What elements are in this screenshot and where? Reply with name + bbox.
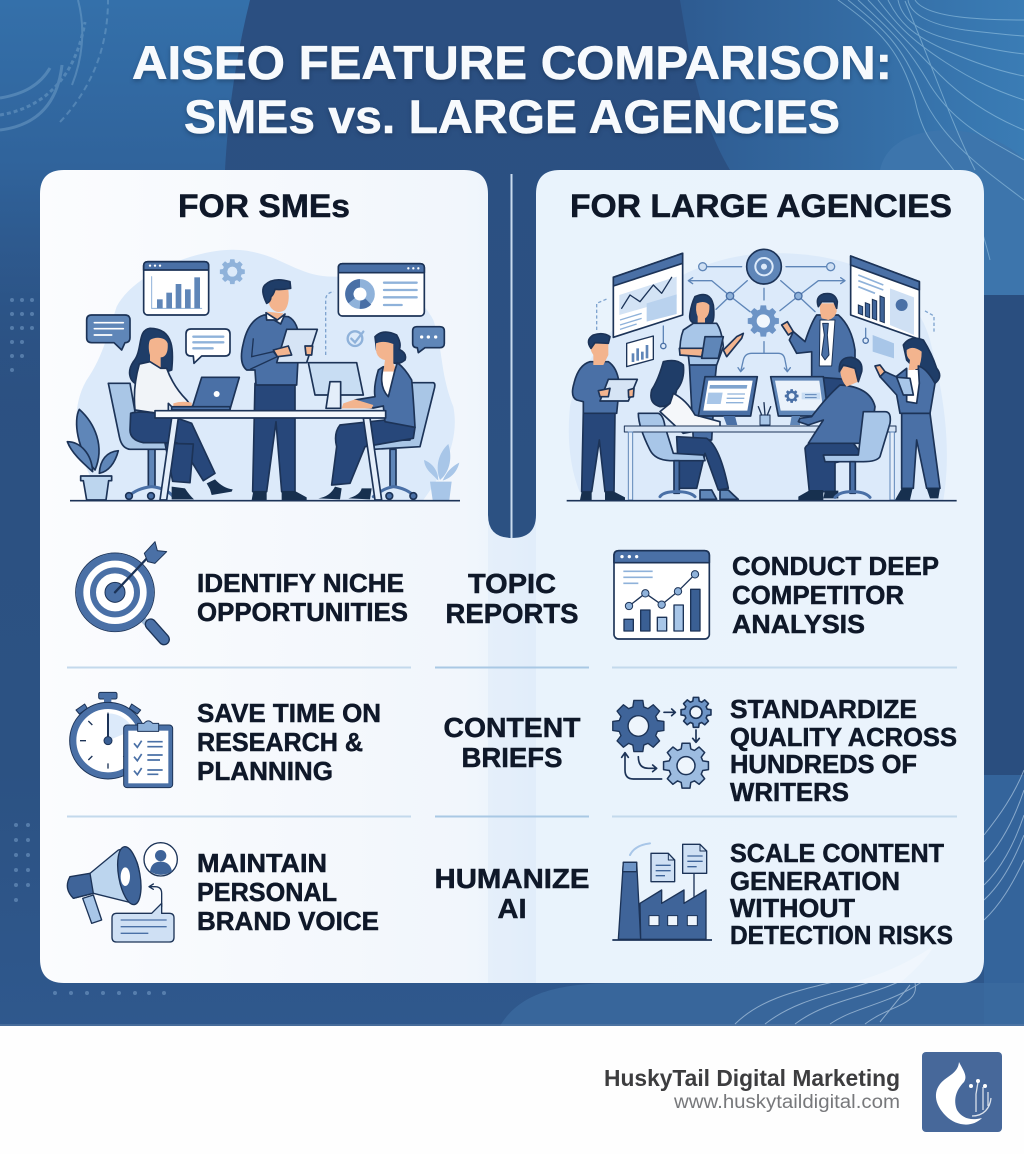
network diagram <box>661 263 868 372</box>
speech bubble: white <box>186 329 230 363</box>
icon: three gears <box>613 697 711 788</box>
laptop <box>172 377 239 410</box>
left woman <box>130 328 233 499</box>
left monitor <box>698 377 757 425</box>
desk <box>624 426 896 500</box>
standing man <box>241 280 317 500</box>
text: GENERATION <box>730 866 900 896</box>
text: CONDUCT DEEP <box>732 551 939 581</box>
text: WRITERS <box>730 777 849 807</box>
text: MAINTAIN <box>197 848 327 878</box>
icon: analytics window <box>614 551 709 639</box>
row 2, center label: content briefs <box>444 712 580 773</box>
brand url: www.huskytaildigital.com <box>673 1092 900 1113</box>
donut chart window <box>338 264 424 316</box>
text: IDENTIFY NICHE <box>197 568 404 598</box>
icon: brand logo <box>922 1052 1002 1132</box>
check mark icon <box>348 331 363 346</box>
speech bubble: dots <box>413 327 444 353</box>
text: QUALITY ACROSS <box>730 722 957 752</box>
text: SAVE TIME ON <box>197 698 381 728</box>
seated man <box>798 357 890 500</box>
left chair <box>108 383 173 499</box>
pen cup <box>758 403 771 425</box>
footer bar <box>0 1026 1024 1154</box>
title: AISEO FEATURE COMPARISON: <box>132 36 892 89</box>
right chair <box>373 383 435 499</box>
icon: target and magnifier <box>76 542 167 639</box>
text: COMPETITOR <box>732 580 904 610</box>
table <box>155 411 386 500</box>
illustration: SME team at a desk <box>67 250 460 501</box>
row 3, agency feature: scale content <box>612 838 953 950</box>
text: OPPORTUNITIES <box>197 597 408 627</box>
text: ANALYSIS <box>732 609 865 639</box>
hub circle <box>747 249 781 284</box>
text <box>197 568 408 627</box>
man with tablet <box>572 334 637 500</box>
seated woman <box>638 361 738 499</box>
text: RESEARCH & <box>197 727 363 757</box>
row 1, SME feature: niche opportunities <box>76 542 408 639</box>
speech bubble: lines <box>87 315 130 350</box>
row 2, center label: content briefs: CONTENT <box>444 712 580 743</box>
man in suit <box>782 294 855 400</box>
text: PERSONAL <box>197 877 337 907</box>
text: SCALE CONTENT <box>730 838 944 868</box>
row 3, center label: humanize AI: AI <box>498 893 526 924</box>
icon: megaphone, user and message <box>67 843 177 942</box>
left tilted screen <box>613 253 683 337</box>
heading: for large agencies: FOR LARGE AGENCIES <box>570 188 952 224</box>
pale plant <box>424 444 459 500</box>
text: DETECTION RISKS <box>730 920 953 950</box>
potted plant <box>67 409 118 500</box>
row 1, center label: topic reports: REPORTS <box>446 598 578 629</box>
text <box>730 694 957 807</box>
illustration: agency team <box>567 249 957 501</box>
bar chart window <box>144 262 209 315</box>
row 3, SME feature: brand voice <box>67 843 379 942</box>
desktop monitor <box>308 363 363 408</box>
row 2, center label: content briefs: BRIEFS <box>462 742 562 773</box>
row 1, center label: topic reports: TOPIC <box>468 568 556 599</box>
centre gear <box>748 305 779 337</box>
text: BRAND VOICE <box>197 906 379 936</box>
brand name: HuskyTail Digital Marketing <box>604 1065 900 1091</box>
text <box>730 838 953 950</box>
text: STANDARDIZE <box>730 694 917 724</box>
heading: for SMEs: FOR SMEs <box>178 188 350 224</box>
text: HUNDREDS OF <box>730 749 917 779</box>
standing woman right <box>875 338 940 500</box>
mini bar chart <box>627 336 653 367</box>
row 3, center label: humanize AI <box>434 863 590 924</box>
gear icon <box>220 259 245 284</box>
icon: factory producing documents <box>612 843 712 940</box>
text <box>197 698 381 786</box>
text: PLANNING <box>197 756 333 786</box>
icon: stopwatch and clipboard <box>70 692 173 788</box>
right woman <box>318 332 415 499</box>
right tilted screen <box>851 256 919 339</box>
text <box>197 848 379 936</box>
title <box>132 36 892 143</box>
row 1, agency feature: competitor analysis <box>614 551 939 639</box>
row 2, SME feature: save time <box>70 692 381 788</box>
right monitor <box>771 377 828 425</box>
row 1, center label: topic reports <box>446 568 578 629</box>
text <box>732 551 939 639</box>
standing woman <box>679 295 743 440</box>
row 3, center label: humanize AI: HUMANIZE <box>434 863 590 894</box>
text: WITHOUT <box>730 893 855 923</box>
row 2, agency feature: standardize quality <box>613 694 957 807</box>
panel: comparison card <box>40 170 984 983</box>
title: SMEs vs. LARGE AGENCIES <box>184 90 840 143</box>
